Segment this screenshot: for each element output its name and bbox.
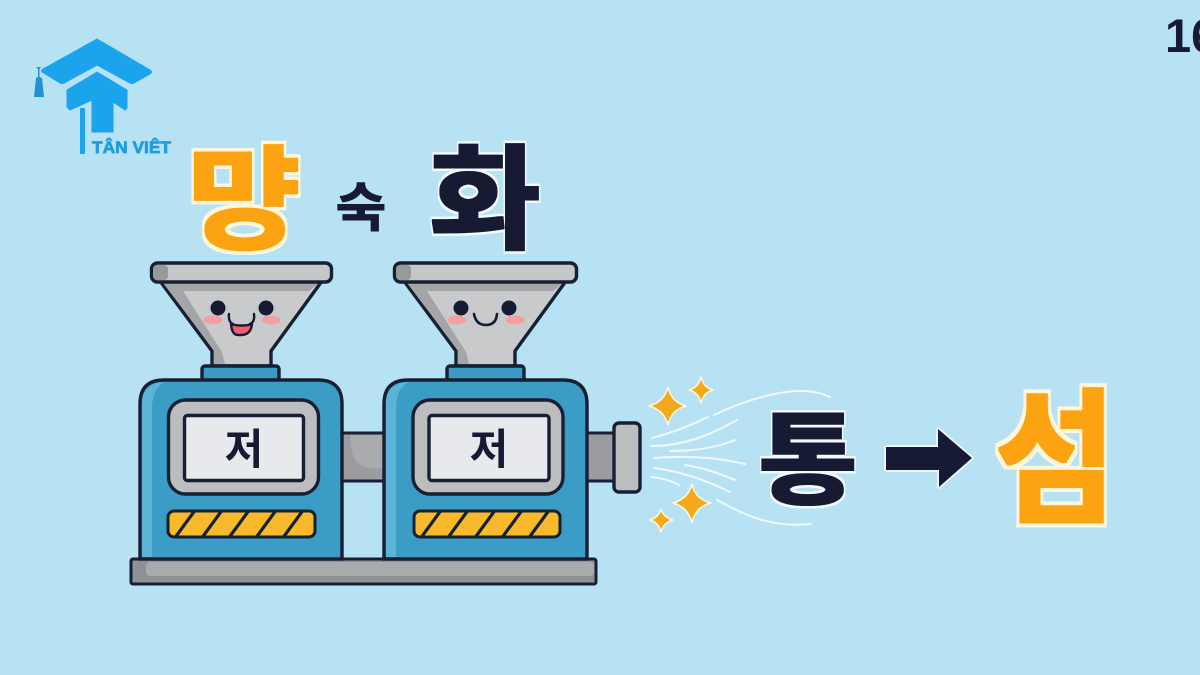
display glyph: 저 — [470, 416, 508, 477]
icon: tassel — [34, 67, 44, 97]
display frame — [168, 400, 318, 494]
output pipe — [586, 423, 640, 492]
face: happy open mouth — [204, 300, 280, 335]
funnel — [160, 281, 322, 366]
display frame — [413, 400, 563, 494]
icon: sparkles — [649, 377, 713, 532]
icon: graduation cap — [42, 39, 151, 84]
machine 1 — [140, 263, 342, 559]
flange — [614, 423, 640, 492]
collar — [202, 366, 279, 381]
icon: arrow — [67, 72, 127, 132]
heading syllable: small: 숙 — [336, 167, 386, 242]
machine base — [131, 559, 596, 584]
hazard stripe — [414, 509, 560, 539]
logo text: TÂN VIÊT — [92, 138, 171, 157]
funnel rim — [394, 263, 576, 282]
result syllable: orange: 섬 — [996, 342, 1115, 553]
display screen — [429, 416, 549, 480]
arrow — [886, 429, 972, 487]
machine 2 — [384, 263, 587, 559]
funnel rim — [152, 263, 332, 282]
display screen — [184, 416, 304, 480]
hazard stripe — [168, 509, 315, 539]
body — [384, 380, 587, 559]
display glyph: 저 — [225, 416, 263, 477]
icon: pole — [80, 108, 85, 154]
connector pipe — [342, 433, 385, 481]
collar — [447, 366, 524, 381]
body — [140, 380, 342, 559]
motion lines — [651, 391, 830, 525]
funnel — [404, 281, 566, 366]
logo: Tân Việt — [34, 39, 171, 157]
face: smile — [448, 300, 524, 325]
result syllable: navy: 통 — [759, 379, 857, 525]
heading syllable: navy: 화 — [430, 107, 540, 273]
heading syllable: orange: 먕 — [188, 108, 300, 273]
